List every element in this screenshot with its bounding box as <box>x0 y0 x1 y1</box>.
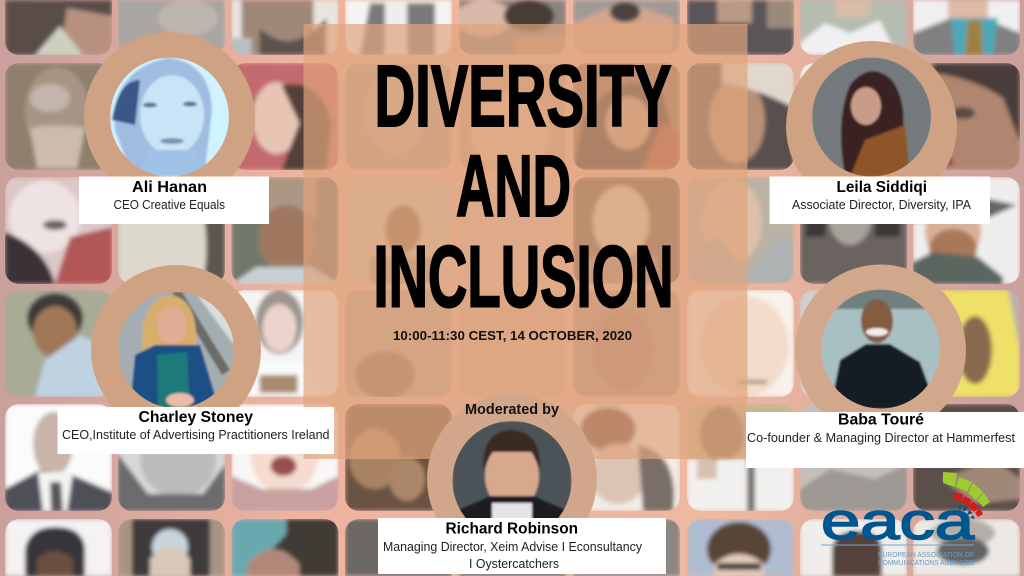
name card: Charley Stoney <box>58 407 334 454</box>
photo: tile behind title <box>459 63 566 173</box>
photo: boy behind panel <box>345 177 452 284</box>
photo: older man <box>118 0 225 55</box>
photo: tile behind panel <box>459 404 566 511</box>
name: Ali Hanan: Ali Hanan <box>132 179 207 196</box>
portrait: Ali Hanan <box>110 57 230 177</box>
photo: pilot with headset <box>687 519 794 576</box>
photo: curly-haired woman <box>573 177 680 284</box>
photo: pale woman lying <box>5 177 112 284</box>
photo: teal curly hair <box>232 519 338 576</box>
photo: man with teal shirt <box>913 0 1020 55</box>
photo: dark tile <box>345 519 452 576</box>
portrait: Richard Robinson <box>452 421 572 541</box>
photo: pale tile <box>800 290 820 396</box>
photo: hidden tile <box>118 290 225 397</box>
role: Charley Stoney: CEO,Institute of Advertising Practitioners Ireland <box>62 428 330 442</box>
name: Richard Robinson: Richard Robinson <box>446 520 578 538</box>
photo: bearded man with hat <box>913 177 1020 284</box>
photo: bearded man <box>232 0 338 55</box>
logo strapline: COMMUNICATIONS AGENCIES <box>878 558 974 567</box>
photo: tile behind panel <box>345 290 452 399</box>
title <box>374 48 674 326</box>
photo: hands dark tile <box>913 404 1020 511</box>
photo: smiling man monochrome <box>118 454 225 511</box>
photo: shirtless man <box>573 0 680 55</box>
photo: girl with glasses <box>687 404 794 511</box>
name: Baba Touré: Baba Touré <box>838 412 924 428</box>
portrait: Charley Stoney <box>118 292 234 408</box>
logo wordmark: eaca <box>821 493 974 551</box>
photo: woman in dark jacket <box>687 0 794 55</box>
portrait: Baba Touré <box>821 289 941 409</box>
photo: laughing girl <box>232 404 338 511</box>
photo: woman with fur hood <box>687 63 794 170</box>
photo: face behind panel <box>459 177 566 284</box>
photo: grey tile <box>800 63 814 80</box>
speaker: Leila Siddiqi <box>770 41 990 224</box>
role: Richard Robinson: Managing Director, Xeim Advise I Econsultancy <box>383 540 643 554</box>
photo: pale grey tile <box>800 404 907 511</box>
speaker: Ali Hanan <box>79 32 269 224</box>
photo: man in grey jacket <box>345 0 452 55</box>
title: AND <box>456 138 571 235</box>
photo: dark tile <box>459 519 566 576</box>
name: Leila Siddiqi: Leila Siddiqi <box>836 179 927 196</box>
photo: man with cap <box>232 177 338 284</box>
name card: Baba Touré <box>746 412 1024 468</box>
photo: girl with red umbrella <box>232 63 338 170</box>
logo strapline <box>878 550 974 567</box>
title: DIVERSITY <box>374 48 672 145</box>
photo: bald smiling man <box>687 177 794 284</box>
photo: woman in sailor top <box>800 0 907 55</box>
photo: tile behind panel <box>459 290 566 397</box>
name: Charley Stoney: Charley Stoney <box>138 409 253 426</box>
photo: two boys <box>345 404 452 511</box>
photo: sadhu <box>118 519 225 576</box>
photo: young man in floral shirt <box>5 290 112 397</box>
title: INCLUSION <box>374 228 674 326</box>
photo: smiling man <box>800 519 907 576</box>
photo: man in monochrome <box>800 224 907 284</box>
label: Moderated by: Moderated by <box>465 402 559 418</box>
photo: woman white tee <box>232 290 338 397</box>
photo: tile behind panel <box>573 290 680 397</box>
photo: nose close-up <box>118 224 225 282</box>
photo: couple smiling <box>456 0 566 55</box>
speaker: Richard Robinson: I Oystercatchers <box>469 557 559 571</box>
logo mark: arcs <box>943 472 990 519</box>
photo: man in suit <box>5 404 112 511</box>
portrait: Leila Siddiqi <box>812 57 932 177</box>
name card: Richard Robinson <box>378 518 666 574</box>
photo: hidden tile <box>118 63 225 170</box>
date: 10:00-11:30 CEST, 14 OCTOBER, 2020 <box>393 328 632 343</box>
photo: blond boy <box>687 290 794 397</box>
logo strapline: EUROPEAN ASSOCIATION OF <box>878 550 974 559</box>
speaker: Charley Stoney <box>58 265 334 454</box>
photo: old man with beard <box>5 63 112 170</box>
role: Leila Siddiqi: Associate Director, Diversity, IPA <box>792 198 972 212</box>
photo: grey tile <box>573 519 680 576</box>
speaker: Baba Touré <box>746 264 1024 468</box>
title panel <box>304 24 748 459</box>
photo: man with sunglasses and turban <box>913 519 1020 576</box>
speaker: Richard Robinson <box>378 394 666 574</box>
name card: Leila Siddiqi <box>770 176 990 224</box>
role: Ali Hanan: CEO Creative Equals <box>114 198 225 212</box>
photo: woman in yellow hijab <box>942 290 1020 397</box>
photo: tile behind title <box>345 63 452 170</box>
photo: woman dark hair <box>5 0 112 55</box>
photo: woman close-up <box>929 63 1020 170</box>
photo: black woman with braids <box>5 519 112 576</box>
role: Baba Touré: Co-founder & Managing Director at Hammerfest <box>747 431 1016 445</box>
photo: woman with hat <box>573 404 680 511</box>
name card: Ali Hanan <box>79 176 269 224</box>
logo: EACA <box>821 472 990 567</box>
photo: woman with red scarf <box>573 63 680 170</box>
